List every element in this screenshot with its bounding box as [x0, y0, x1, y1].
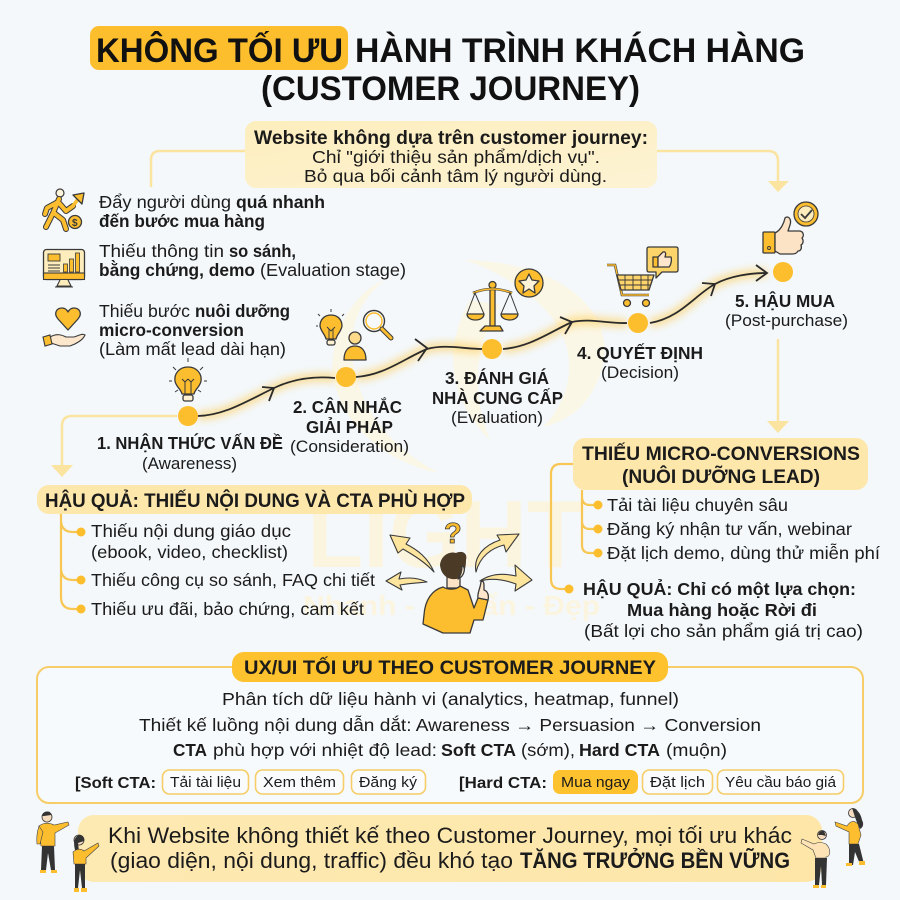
body text: Hard CTA: [579, 740, 660, 760]
illustration: confused person with four arrows: [386, 518, 532, 633]
body text: (sớm),: [521, 740, 575, 760]
text: missing micro-conversion nurturing: micro-conversion: [99, 320, 244, 340]
text: lacking comparison information: so sánh,: [229, 241, 296, 261]
text: pushes users too fast: quá nhanh: [236, 192, 325, 212]
step 1 label: (Awareness): [142, 455, 237, 473]
hard CTA group: Yêu cầu báo giá: [725, 774, 837, 791]
bullet tree: [61, 514, 86, 614]
soft CTA group: [75, 770, 426, 794]
step 2 label: 2. CÂN NHẮC: [293, 396, 402, 417]
bullet text: Tải tài liệu chuyên sâu: [607, 495, 788, 515]
hard CTA group: Đặt lịch: [650, 774, 705, 791]
bullet text: [91, 521, 375, 619]
title: (CUSTOMER JOURNEY): [261, 70, 640, 108]
watermark: brand logo: [303, 260, 605, 621]
callout: website not based on customer journey: Bỏ qua bối cảnh tâm lý người dùng.: [304, 166, 607, 186]
heading pill: [232, 652, 668, 682]
bullet text: (ebook, video, checklist): [91, 542, 288, 562]
connector arrow: callout to post-purchase: [657, 151, 789, 192]
callout: website not based on customer journey: Chỉ "giới thiệu sản phẩm/dịch vụ".: [312, 147, 600, 167]
banner: conclusion: [78, 815, 822, 882]
text: missing micro-conversion nurturing: [99, 301, 290, 359]
direction arrows: [386, 534, 532, 591]
step 3 label: [432, 367, 563, 427]
bullet text: [607, 495, 880, 563]
body text: phù hợp với nhiệt độ lead:: [213, 740, 437, 760]
person ear and cheek: [458, 566, 464, 579]
title: KHÔNG TỐI ƯU: [96, 31, 343, 70]
consequence text: (Bất lợi cho sản phẩm giá trị cao): [584, 621, 863, 641]
panel: left consequences: [37, 485, 472, 619]
bullet text: Đăng ký nhận tư vấn, webinar: [607, 519, 852, 539]
step 5 label: (Post-purchase): [725, 312, 848, 330]
icon: running person with growth arrow and coin: $: [72, 218, 78, 229]
body text: [139, 689, 761, 760]
body text: Soft CTA: [441, 740, 516, 760]
heading: lacking content and CTA: HẬU QUẢ: THIẾU NỘI DUNG VÀ CTA PHÙ HỢP: [45, 490, 465, 512]
icon: thumbs up with check badge: [763, 202, 818, 254]
text: missing micro-conversion nurturing: Thiếu bước: [99, 301, 190, 321]
step 5 label: 5. HẬU MUA: [735, 290, 835, 311]
person hand: [478, 581, 488, 600]
heading: lacking micro-conversions: (NUÔI DƯỠNG LEAD): [622, 466, 820, 488]
icon: shopping cart with thumbs-up bubble: [607, 247, 678, 306]
step 5 label: [725, 290, 848, 330]
text: lacking comparison information: [99, 241, 406, 280]
callout: website not based on customer journey: Website không dựa trên customer journey:: [254, 128, 648, 149]
consequence text: [583, 578, 863, 641]
watermark: brand logo: LIGHT: [307, 481, 583, 588]
step 5 node: [773, 262, 793, 282]
text: pushes users too fast: đến bước mua hàng: [99, 211, 265, 231]
step 4 label: [577, 342, 703, 382]
step 2 label: (Consideration): [290, 438, 409, 456]
step 1 label: 1. NHẬN THỨC VẤN ĐỀ: [97, 432, 283, 453]
figure: woman pointing, left: [73, 835, 99, 892]
connector arrow: callout to left list: [151, 151, 245, 186]
banner: conclusion: (giao diện, nội dung, traffic) đều khó tạo: [110, 848, 513, 873]
step 4 node: [628, 313, 648, 333]
step 1 node: [178, 406, 198, 426]
bullet text: Thiếu ưu đãi, bảo chứng, cam kết: [91, 599, 364, 619]
step 2 label: GIẢI PHÁP: [306, 416, 393, 437]
figure: man pointing, far left: [37, 812, 69, 873]
step 3 label: (Evaluation): [451, 409, 543, 427]
icon: lightbulb, person and magnifier (consideration): [316, 309, 391, 360]
soft CTA group: Tải tài liệu: [170, 774, 241, 791]
heading: lacking micro-conversions: THIẾU MICRO-CONVERSIONS: [582, 443, 860, 465]
title: HÀNH TRÌNH KHÁCH HÀNG: [355, 32, 805, 70]
icon: heart above open hand: [43, 308, 85, 346]
body text: Thiết kế luồng nội dung dẫn dắt: Awareness → Persuasion → Conversion: [139, 714, 761, 735]
step 3 label: NHÀ CUNG CẤP: [432, 387, 563, 408]
step 2 label: [290, 396, 409, 456]
soft CTA group: Xem thêm: [263, 774, 336, 791]
step 4 label: 4. QUYẾT ĐỊNH: [577, 342, 703, 363]
banner: conclusion: TĂNG TRƯỞNG BỀN VỮNG: [520, 848, 790, 873]
consequence text: HẬU QUẢ: Chỉ có một lựa chọn:: [583, 578, 856, 599]
connector: heading to consequence: [551, 464, 574, 594]
soft CTA group: Đăng ký: [359, 774, 418, 791]
heading: lacking micro-conversions: [573, 438, 868, 490]
text: lacking comparison information: bằng chứng, demo: [99, 259, 255, 280]
text: pushes users too fast: [99, 192, 325, 231]
step 3 label: 3. ĐÁNH GIÁ: [445, 367, 549, 388]
bullet text: Thiếu nội dung giáo dục: [91, 521, 291, 541]
step 4 label: (Decision): [601, 364, 679, 382]
consequence text: Mua hàng hoặc Rời đi: [627, 600, 817, 620]
person head: [440, 552, 466, 579]
callout: website not based on customer journey: [245, 121, 657, 188]
connector arrow: post-purchase to micro-conversions: [767, 340, 789, 433]
text: missing micro-conversion nurturing: nuôi dưỡng: [195, 301, 290, 321]
banner: conclusion: Khi Website không thiết kế theo Customer Journey, mọi tối ưu khác: [108, 823, 792, 848]
text: lacking comparison information: Thiếu thông tin: [99, 241, 224, 261]
step 3 node: [482, 339, 502, 359]
bullet tree: [582, 490, 602, 558]
text: pushes users too fast: Đẩy người dùng: [99, 192, 231, 212]
icon: balance scale with star badge: [467, 269, 543, 331]
hard CTA group: [459, 770, 844, 794]
figure: man pointing, right: [801, 830, 830, 888]
connector arrow: step 1 to left consequences: [51, 416, 176, 477]
body text: Phân tích dữ liệu hành vi (analytics, heatmap, funnel): [222, 689, 679, 709]
person body: [423, 586, 488, 633]
body text: (muộn): [666, 740, 727, 760]
icon: running person with growth arrow and coin: [45, 189, 84, 229]
question mark: ?: [444, 518, 462, 550]
hard CTA group: [Hard CTA:: [459, 775, 547, 792]
icon: monitor with charts: [44, 250, 84, 287]
soft CTA group: [Soft CTA:: [75, 775, 156, 792]
body text: CTA: [173, 740, 207, 760]
panel: UX/UI optimisation: [37, 652, 863, 803]
hard CTA group: Mua ngay: [561, 774, 631, 791]
bullet text: Đặt lịch demo, dùng thử miễn phí: [607, 542, 880, 563]
heading pill: UX/UI TỐI ƯU THEO CUSTOMER JOURNEY: [244, 657, 656, 679]
icon: lightbulb (awareness): [169, 358, 207, 401]
panel: right micro-conversions: [551, 438, 880, 641]
step 2 node: [336, 367, 356, 387]
journey path with arrows: [198, 265, 767, 416]
step 1 label: [97, 432, 283, 473]
text: lacking comparison information: (Evaluation stage): [260, 260, 406, 280]
title: [90, 26, 805, 108]
figure: woman pointing, right: [835, 808, 865, 866]
bullet text: Thiếu công cụ so sánh, FAQ chi tiết: [91, 570, 375, 590]
watermark: brand logo: Nhanh - Chuẩn - Đẹp: [303, 590, 600, 621]
person neck: [447, 576, 460, 588]
text: missing micro-conversion nurturing: (Làm mất lead dài hạn): [99, 339, 286, 359]
